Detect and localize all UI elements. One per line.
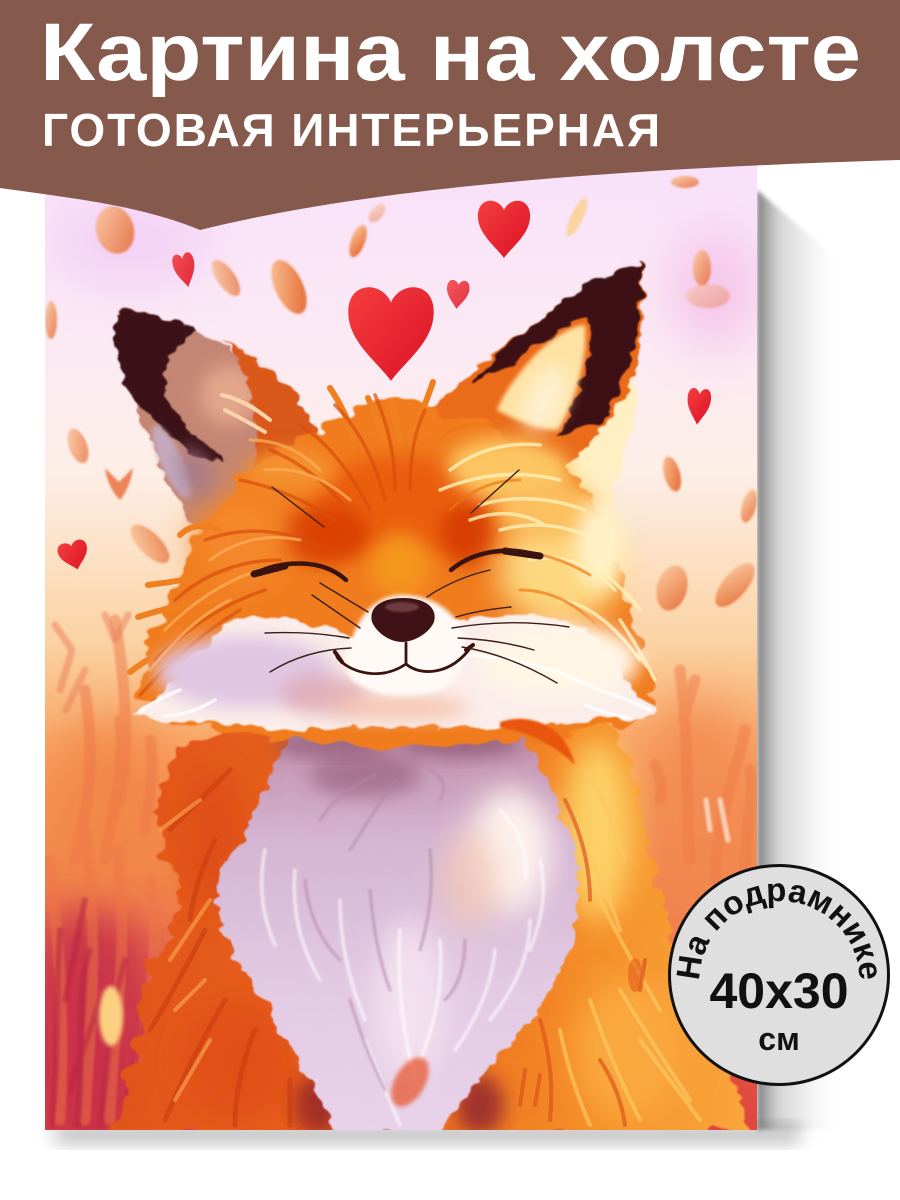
foreground petals bbox=[99, 958, 642, 1113]
white cheeks and muzzle bbox=[133, 595, 655, 765]
chest fur strokes bbox=[262, 770, 543, 1125]
canvas artwork bbox=[45, 166, 757, 1130]
head bbox=[130, 382, 655, 765]
nose bbox=[371, 598, 435, 642]
red hearts bbox=[56, 201, 712, 573]
body fur strokes bbox=[150, 770, 700, 1125]
whiskers bbox=[265, 470, 569, 683]
size badge bbox=[668, 864, 890, 1086]
fox bbox=[112, 262, 752, 1135]
fox body bbox=[112, 700, 752, 1135]
title: Картина на холсте bbox=[40, 7, 861, 98]
painted background bbox=[45, 166, 757, 1130]
smile bbox=[335, 643, 473, 674]
grass bbox=[50, 615, 751, 1125]
curved label: На подрамнике bbox=[676, 883, 877, 979]
fox chest bbox=[217, 710, 578, 1135]
head colour patches bbox=[195, 433, 624, 625]
header banner bbox=[0, 0, 900, 230]
falling petals bbox=[45, 176, 762, 614]
unit: см bbox=[758, 1021, 800, 1057]
head fur strokes bbox=[130, 382, 655, 695]
size value: 40х30 bbox=[709, 963, 849, 1019]
closed eyes bbox=[254, 551, 540, 580]
left ear bbox=[114, 311, 320, 540]
subtitle: ГОТОВАЯ ИНТЕРЬЕРНАЯ bbox=[42, 104, 660, 156]
right ear bbox=[425, 262, 642, 512]
canvas shadow bbox=[55, 190, 832, 1142]
